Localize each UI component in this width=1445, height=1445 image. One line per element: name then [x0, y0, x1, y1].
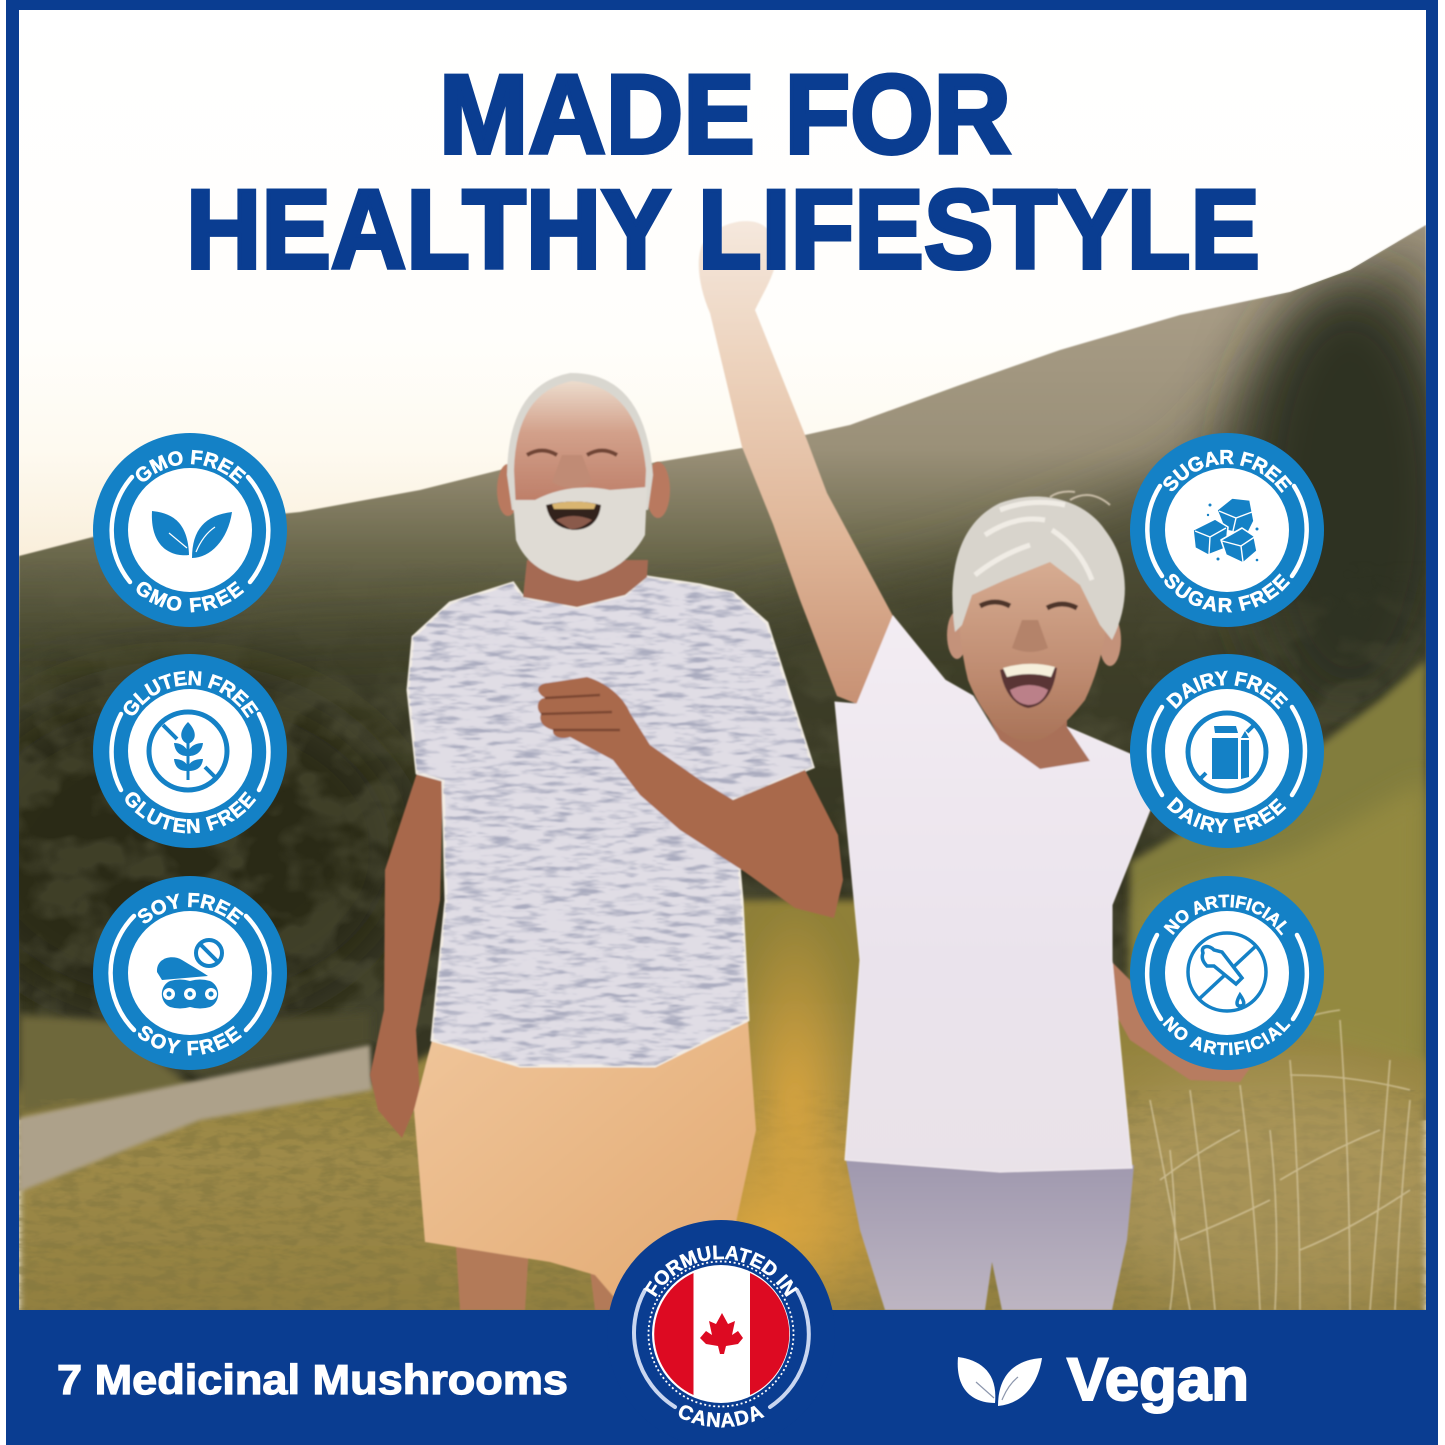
title: HEALTHY LIFESTYLE [186, 167, 1260, 292]
badge: sugar free [1130, 433, 1324, 627]
badge: no artificial: NO ARTIFICIAL [1164, 894, 1287, 936]
man head [497, 373, 670, 581]
frame: right border [1426, 0, 1438, 1445]
title: MADE FOR [439, 52, 1011, 177]
footer band [6, 1310, 1438, 1445]
badge: dairy free: DAIRY FREE [1166, 670, 1288, 710]
man t-shirt [408, 577, 813, 1066]
woman back arm [1108, 960, 1250, 1082]
badge: GMO free: GMO FREE [136, 580, 244, 612]
Canada badge [610, 1220, 832, 1428]
woman jeans [846, 1160, 1134, 1310]
badge: no artificial: NO ARTIFICIAL [1162, 1016, 1291, 1056]
frame: top border [6, 0, 1438, 10]
Canadian flag [654, 1273, 789, 1395]
man t-shirt pattern [400, 575, 820, 1070]
Canada badge: CANADA [678, 1405, 765, 1428]
Canada badge: FORMULATED IN [644, 1246, 798, 1297]
icon: leaves [152, 511, 232, 558]
photo: cheering woman [699, 221, 1250, 1310]
badge: sugar free: SUGAR FREE [1164, 573, 1290, 612]
badge: gluten free: GLUTEN FREE [124, 670, 259, 718]
icon: sugar cubes [1193, 498, 1258, 563]
badge: sugar free: SUGAR FREE [1163, 450, 1292, 493]
background photo: hillside landscape [19, 224, 1426, 1310]
icon: soy pods [157, 940, 222, 1008]
icon: white leaves [958, 1357, 1042, 1406]
man left arm [370, 773, 443, 1138]
badge: soy free: SOY FREE [138, 892, 244, 925]
badge: GMO free [93, 433, 287, 627]
icon: crossed milk carton [1188, 713, 1266, 791]
badge: soy free: SOY FREE [138, 1026, 242, 1056]
woman neck [988, 718, 1090, 770]
badge: no artificial [1130, 876, 1324, 1070]
footer text: vegan: Vegan [1067, 1346, 1249, 1413]
man forearm and hand [538, 677, 843, 918]
badge: gluten free [93, 654, 287, 848]
man shorts [414, 1020, 756, 1310]
footer text: 7 medicinal mushrooms: 7 Medicinal Mushrooms [57, 1356, 568, 1403]
icon: crossed wheat [149, 712, 227, 790]
badge: dairy free [1130, 654, 1324, 848]
icon: crossed dropper [1188, 933, 1266, 1011]
woman t-shirt [835, 616, 1150, 1172]
photo: running man [370, 373, 843, 1310]
man legs [456, 1246, 614, 1310]
man neck [523, 560, 648, 607]
title [186, 52, 1260, 292]
badge: gluten free: GLUTEN FREE [125, 791, 256, 834]
badge: dairy free: DAIRY FREE [1166, 796, 1286, 834]
woman raised arm [699, 221, 893, 704]
badge: soy free [93, 876, 287, 1070]
woman head [947, 492, 1125, 742]
frame: left border [6, 0, 19, 1445]
badge: GMO free: GMO FREE [136, 450, 246, 484]
